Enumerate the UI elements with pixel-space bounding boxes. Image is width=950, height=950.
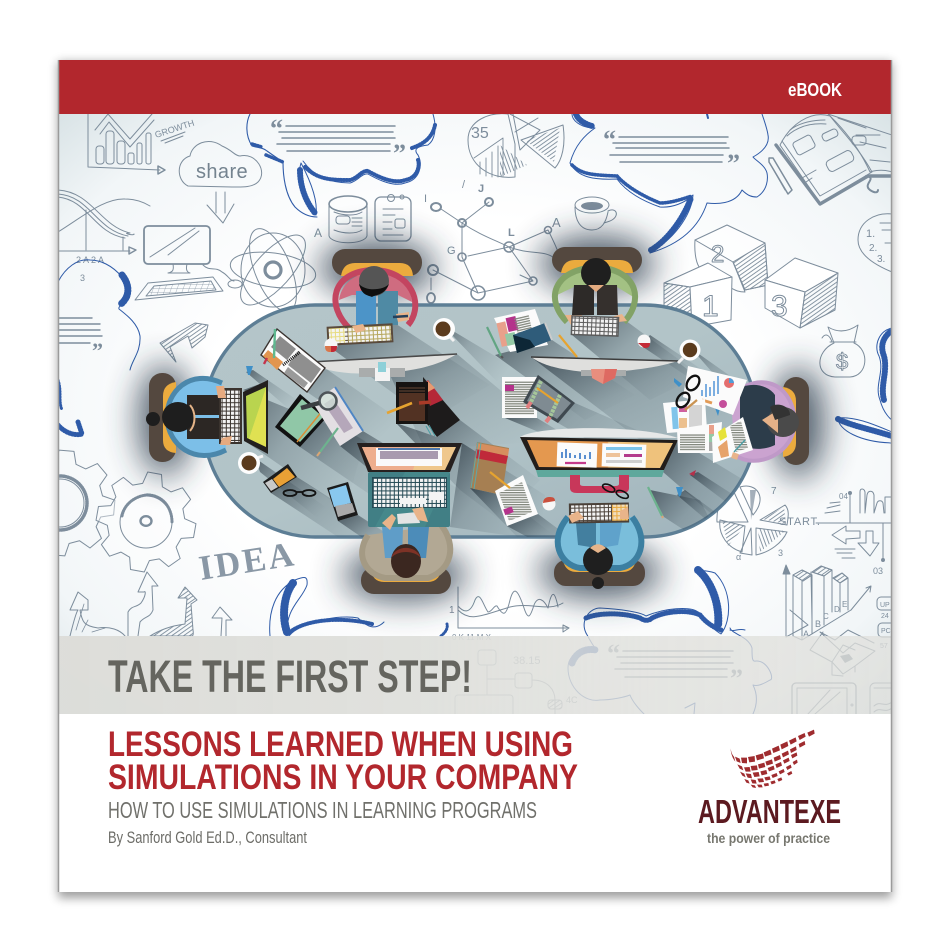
doodle: right blue bubble bbox=[838, 328, 892, 443]
doodle: IDEA lettering: IDEA bbox=[196, 534, 299, 588]
doodle: share cloud with arrow bbox=[179, 141, 262, 223]
doodle: right edge labels: UP bbox=[880, 602, 890, 609]
top right documents and folder bbox=[487, 309, 577, 358]
doodle: left blue bubble bbox=[58, 260, 140, 435]
document with stripes bbox=[502, 377, 537, 418]
person: top left, crimson sweater bbox=[327, 249, 422, 346]
label: eBOOK: eBOOK bbox=[788, 80, 842, 100]
doodle: upper right speech bubble: ” bbox=[727, 149, 740, 178]
doodle: money bag bbox=[820, 325, 865, 377]
doodle: fan pie chart: α bbox=[736, 552, 741, 562]
doodle: left blue bubble: ” bbox=[92, 338, 103, 363]
doodle: numbered list bubble: 1. bbox=[866, 228, 875, 240]
title: lessons learned bbox=[108, 724, 578, 797]
logo mark: curved mesh bbox=[731, 730, 815, 788]
doodle: bottom blue bubble: ” bbox=[730, 664, 743, 693]
subtitle: HOW TO USE SIMULATIONS IN LEARNING PROGRAMS bbox=[108, 797, 537, 823]
people drop shadows bbox=[139, 236, 824, 601]
doodle: network graph bbox=[424, 179, 561, 303]
person: top right, green sweater bbox=[552, 247, 642, 337]
doodle: right edge labels bbox=[876, 596, 891, 648]
doodle: curve graph: 3 bbox=[80, 273, 85, 283]
doodle: pie chart 35: 35 bbox=[471, 125, 489, 142]
doodle: 3D bar chart: A bbox=[803, 629, 809, 639]
doodle: upper right speech bubble bbox=[570, 114, 768, 253]
doodle: 3D bar chart: B bbox=[815, 619, 821, 629]
doodle: open book bbox=[776, 114, 892, 204]
glasses: right table bbox=[674, 373, 702, 410]
tablet phone bbox=[327, 482, 358, 521]
illustration: office doodles and meeting table bbox=[5, 114, 896, 728]
doodle: share cloud with arrow: share bbox=[196, 161, 248, 183]
cup: left bbox=[238, 452, 263, 474]
doodle: curve graph bbox=[58, 190, 150, 283]
doodle: line chart: 0 K 11 M X bbox=[452, 633, 492, 642]
doodle: right edge labels: 24 bbox=[881, 613, 889, 620]
heading: take the first step: TAKE THE FIRST STEP! bbox=[108, 651, 472, 702]
doodle: numbered list bubble bbox=[858, 214, 892, 272]
doodle: canned food and notepad bbox=[329, 194, 411, 243]
doodle: open box bbox=[810, 630, 875, 676]
doodle: network graph: L bbox=[508, 227, 515, 239]
glasses: left bbox=[284, 490, 316, 496]
title: lessons learned: SIMULATIONS IN YOUR COMPANY bbox=[108, 757, 578, 797]
doodle: network graph: I bbox=[424, 193, 427, 205]
person: bottom left, taupe sweater with laptop bbox=[357, 443, 462, 594]
banner: gray overlay bbox=[58, 636, 892, 714]
pill: bottom bbox=[542, 497, 556, 510]
doodle: start flow chart bbox=[779, 489, 892, 576]
green book bbox=[275, 394, 327, 447]
doodle: striped arrow bbox=[160, 323, 208, 362]
doodle: bottom blue bubble bbox=[270, 570, 772, 714]
pill: right bbox=[638, 334, 650, 348]
long item shadows on table bbox=[243, 315, 742, 537]
header bar bbox=[58, 60, 892, 114]
card side borders bbox=[58, 60, 892, 892]
doodle: numbered cubes: 1 bbox=[702, 290, 719, 323]
doodle: tablet and phone bbox=[792, 682, 891, 714]
paper stack: right table bbox=[663, 366, 753, 463]
orange phone bbox=[263, 464, 297, 493]
doodle: gears bbox=[59, 450, 196, 572]
doodle: letters around atom: A bbox=[314, 226, 322, 240]
striped paper bbox=[490, 472, 538, 526]
logo: advantexe: ADVANTEXE bbox=[698, 793, 841, 830]
pencil and pins: lower right bbox=[648, 378, 720, 518]
gray tablet with pencil bbox=[523, 375, 575, 423]
doodle: pie chart 35 bbox=[468, 114, 564, 177]
doodle: growth bar chart bbox=[88, 114, 196, 174]
doodle: desktop computer and keyboard bbox=[135, 226, 242, 300]
doodles: hand-drawn background sketches bbox=[5, 114, 896, 728]
doodle: network graph: J bbox=[478, 183, 484, 195]
doodle: fan pie chart: 7 bbox=[771, 486, 777, 497]
notebook with panels bbox=[261, 329, 325, 392]
cup: right bbox=[678, 340, 700, 363]
back monitor right bbox=[531, 357, 678, 384]
doodle: pen bbox=[769, 158, 792, 194]
doodle: numbered cubes: 2 bbox=[711, 241, 724, 268]
doodle: growing arrows bbox=[70, 572, 232, 636]
doodle: numbered cubes: 3 bbox=[771, 290, 788, 323]
doodle: 3D bar chart: E bbox=[842, 600, 847, 609]
doodle: line chart: 1 bbox=[449, 605, 455, 616]
doodle: network graph: A bbox=[552, 215, 561, 230]
meeting table bbox=[203, 305, 757, 537]
doodle: start flow chart: 04 bbox=[839, 492, 848, 501]
doodle: 3D bar chart bbox=[783, 565, 871, 640]
pill: top left bbox=[324, 338, 338, 352]
doodle: top speech bubble bbox=[247, 114, 435, 217]
logo: advantexe: the power of practice bbox=[707, 830, 830, 846]
doodle: money bag: $ bbox=[836, 349, 848, 374]
doodle: top speech bubble: “ bbox=[270, 114, 283, 143]
dark book and pencil bbox=[387, 377, 460, 437]
doodle: 3D bar chart: C bbox=[823, 612, 829, 621]
glasses: under monitor bbox=[601, 482, 629, 500]
brown book bbox=[470, 442, 509, 495]
doodle: numbered list bubble: 3. bbox=[877, 254, 885, 265]
byline: By Sanford Gold Ed.D., Consultant bbox=[108, 829, 307, 847]
back monitor left bbox=[310, 354, 457, 381]
doodle: growth bar chart: GROWTH bbox=[154, 118, 196, 140]
logo: advantexe bbox=[698, 730, 841, 846]
doodle: line chart bbox=[449, 587, 569, 642]
doodle: network graph: / bbox=[462, 179, 466, 191]
doodle: numbered list bubble: 2. bbox=[869, 243, 877, 254]
doodle: upper right speech bubble: “ bbox=[603, 125, 616, 154]
title: lessons learned: LESSONS LEARNED WHEN USING bbox=[108, 724, 573, 764]
cup: top left bbox=[433, 318, 455, 341]
doodle: faded flow chart: 4C bbox=[566, 695, 578, 705]
card drop shadow bbox=[58, 62, 892, 898]
doodle: atom bbox=[230, 228, 316, 310]
doodle: fan pie chart bbox=[717, 486, 788, 562]
person: bottom right, blue sweater with ponytail bbox=[554, 502, 645, 589]
doodle: bottom blue bubble: “ bbox=[607, 639, 620, 668]
doodle: top speech bubble: ” bbox=[393, 139, 406, 168]
doodle: faded flow chart bbox=[455, 650, 578, 719]
doodle: start flow chart: 03 bbox=[873, 566, 883, 576]
doodle: right edge labels: 57 bbox=[880, 643, 888, 650]
blue pin: left bbox=[246, 366, 253, 375]
person: left, blue top with laptop bbox=[146, 373, 268, 462]
person: right, purple sweater bbox=[731, 377, 809, 465]
doodle: 3D bar chart: D bbox=[834, 605, 840, 614]
newspaper and magnifier bbox=[301, 387, 363, 456]
front monitor with charts bbox=[520, 428, 678, 493]
doodle: start flow chart: START. bbox=[779, 516, 821, 528]
doodle: coffee cup bbox=[575, 197, 616, 230]
doodle: fan pie chart: 3 bbox=[778, 548, 783, 558]
doodle: curve graph: 2 A 2 A bbox=[76, 255, 104, 265]
doodle: network graph: G bbox=[447, 245, 456, 257]
doodle: faded flow chart: 38.15 bbox=[513, 655, 541, 667]
doodle: numbered cubes bbox=[664, 225, 838, 328]
doodle: right edge labels: PC bbox=[881, 628, 891, 635]
